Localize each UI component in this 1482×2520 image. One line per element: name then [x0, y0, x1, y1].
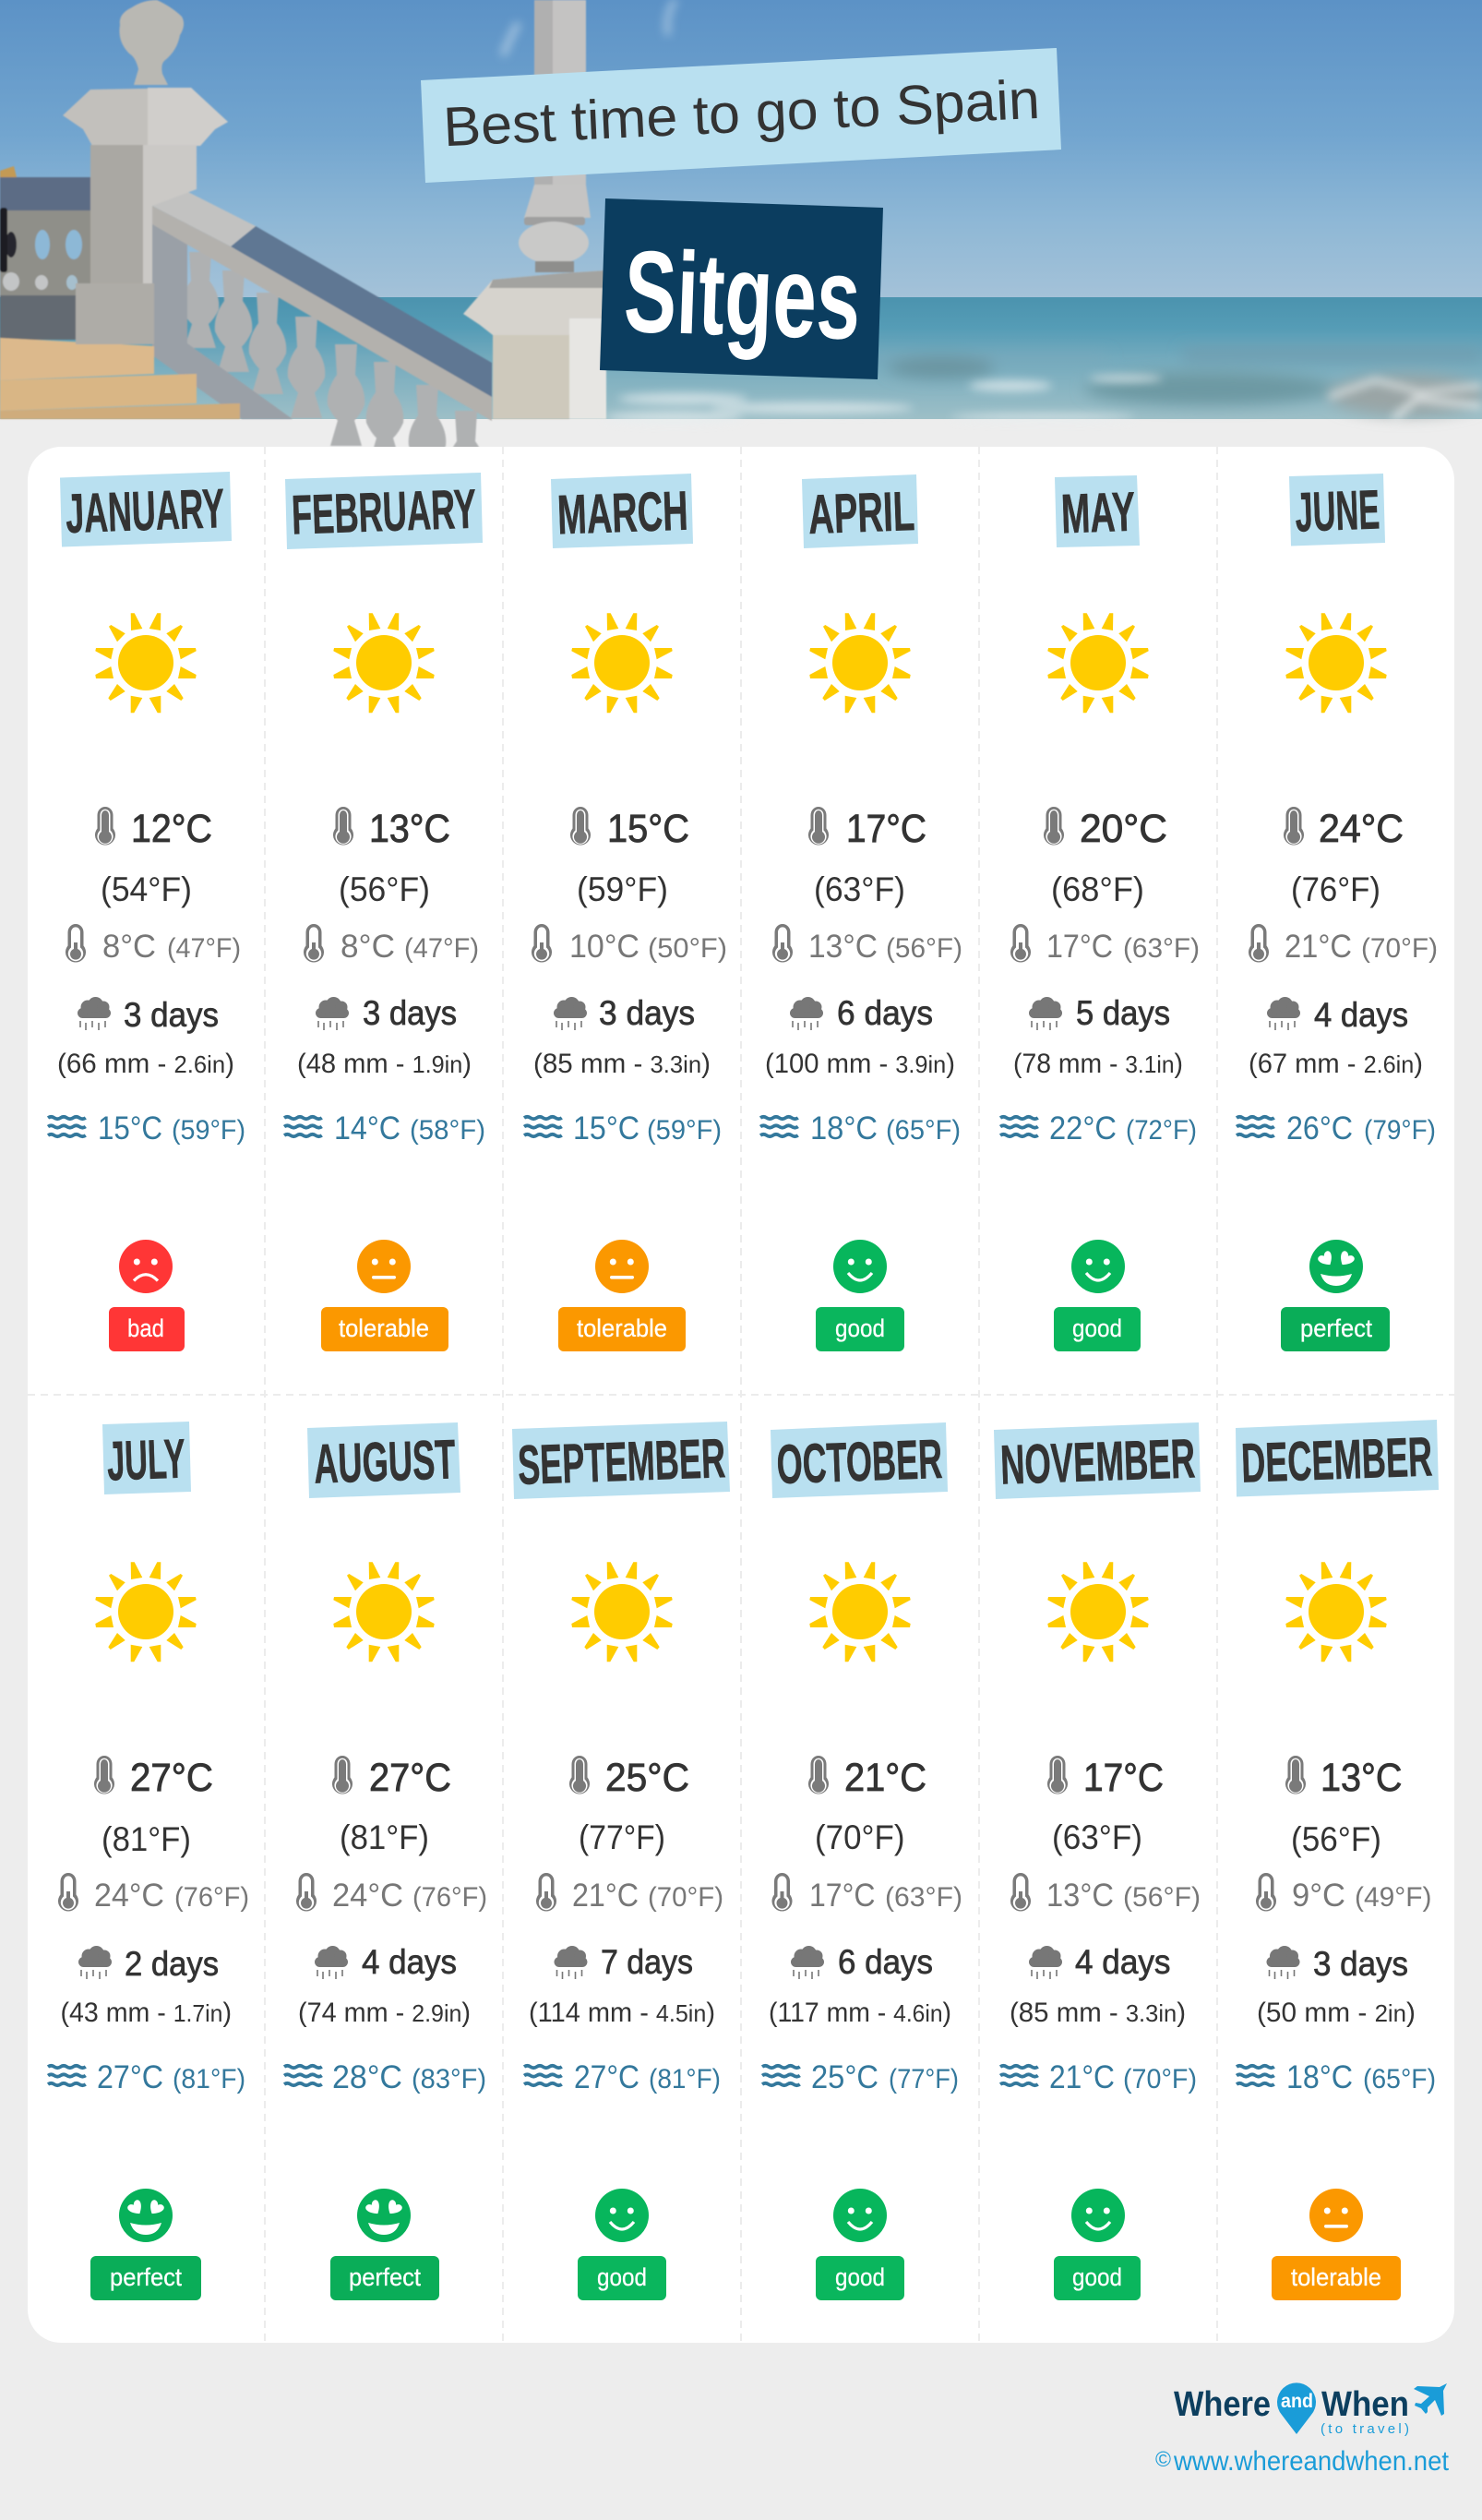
month label: AUGUST — [313, 1428, 457, 1495]
rainfall: (78 mm - 3.1in) — [1013, 1049, 1183, 1079]
panel: May — [1000, 475, 1200, 1351]
rating — [1054, 1240, 1141, 1351]
panel: July — [48, 1422, 249, 2300]
low temperature — [771, 1873, 962, 1914]
average temperature: (76°F) — [1291, 870, 1380, 908]
rating: good — [835, 2263, 885, 2291]
logo: Where and When (to travel): When — [1321, 2385, 1409, 2424]
rating: perfect — [110, 2263, 182, 2291]
low temperature: 13°C — [808, 929, 878, 965]
low temperature: 13°C — [1046, 1878, 1114, 1914]
low temperature: 9°C — [1292, 1878, 1345, 1914]
low temperature: (50°F) — [648, 933, 727, 964]
low temperature: (56°F) — [886, 933, 962, 964]
low temperature — [304, 924, 479, 965]
rainfall: 3 days — [363, 994, 457, 1032]
sea temperature: (77°F) — [889, 2064, 959, 2094]
average temperature: 27°C — [369, 1756, 451, 1800]
panel: October — [762, 1422, 962, 2300]
rainfall: (48 mm - 1.9in) — [297, 1049, 472, 1079]
low temperature: 8°C — [102, 929, 156, 965]
rating — [321, 1240, 448, 1351]
panel: September — [512, 1422, 730, 2300]
month label — [285, 473, 483, 549]
rating: good — [1072, 2263, 1122, 2291]
low temperature — [1256, 1873, 1432, 1914]
sea temperature: 15°C — [573, 1110, 639, 1146]
sea temperature: (65°F) — [1363, 2064, 1436, 2094]
average temperature — [95, 807, 212, 908]
rainfall: (114 mm - 4.5in) — [529, 1998, 715, 2028]
rainfall: 4 days — [1075, 1943, 1170, 1981]
low temperature — [296, 1873, 487, 1914]
month label — [1289, 474, 1385, 546]
sea temperature — [524, 2059, 721, 2095]
average temperature: 25°C — [605, 1756, 689, 1800]
icon: sun — [809, 1562, 911, 1662]
copyright url: © — [1155, 2447, 1171, 2471]
low temperature: (63°F) — [1123, 933, 1200, 964]
low temperature: 17°C — [1046, 929, 1113, 965]
average temperature: 13°C — [1321, 1756, 1403, 1800]
panel: November — [994, 1422, 1201, 2300]
sea temperature: 18°C — [810, 1110, 878, 1146]
average temperature: 17°C — [1083, 1756, 1164, 1800]
copyright url: www.whereandwhen.net — [1173, 2446, 1450, 2477]
month label: FEBRUARY — [291, 478, 477, 546]
average temperature: (81°F) — [102, 1820, 191, 1858]
stair balusters — [182, 252, 484, 512]
sea temperature: (81°F) — [173, 2064, 245, 2094]
rating — [558, 1240, 686, 1351]
sea temperature — [762, 2059, 959, 2095]
rainfall: (50 mm - 2in) — [1257, 1998, 1416, 2028]
rainfall: 6 days — [838, 1943, 933, 1981]
month label: MAY — [1060, 481, 1136, 545]
sea temperature: 18°C — [1286, 2059, 1353, 2095]
average temperature — [569, 1756, 689, 1856]
month label: SEPTEMBER — [517, 1427, 726, 1496]
rainfall — [61, 1945, 232, 2028]
sea temperature: 25°C — [811, 2059, 878, 2095]
middle post and urn — [534, 0, 586, 189]
panel: August — [284, 1422, 487, 2300]
low temperature: (47°F) — [404, 933, 479, 964]
average temperature: (54°F) — [101, 870, 192, 908]
sea temperature: 27°C — [574, 2059, 639, 2095]
sea temperature: 28°C — [332, 2059, 402, 2095]
average temperature — [1285, 1756, 1403, 1858]
rating — [816, 2189, 904, 2300]
sea temperature: (59°F) — [172, 1115, 245, 1146]
rating — [109, 1240, 185, 1351]
average temperature — [570, 807, 689, 908]
low temperature: (63°F) — [885, 1882, 962, 1913]
rating: perfect — [349, 2263, 421, 2291]
month label: JULY — [106, 1428, 186, 1492]
sea temperature — [48, 1110, 245, 1146]
low temperature: 21°C — [1285, 929, 1352, 965]
sea temperature: (72°F) — [1126, 1115, 1197, 1146]
sea temperature: (58°F) — [410, 1115, 485, 1146]
average temperature: 24°C — [1319, 807, 1404, 851]
rating: good — [835, 1314, 885, 1342]
average temperature — [808, 1756, 926, 1856]
left post with finial — [119, 0, 184, 85]
panel: April — [760, 474, 962, 1351]
rainfall — [1249, 996, 1423, 1079]
panel: March — [524, 474, 727, 1351]
low temperature: 8°C — [341, 929, 395, 965]
low temperature — [66, 924, 241, 965]
city name banner — [600, 198, 883, 379]
rainfall: 2 days — [125, 1945, 219, 1983]
month label — [102, 1422, 191, 1494]
low temperature: (76°F) — [412, 1882, 487, 1913]
average temperature: 27°C — [130, 1756, 213, 1800]
sea temperature: (79°F) — [1364, 1115, 1436, 1146]
rainfall — [1010, 1943, 1186, 2028]
rating — [578, 2189, 666, 2300]
panel: June — [1237, 474, 1438, 1351]
rainfall: (117 mm - 4.6in) — [769, 1998, 951, 2028]
rainfall — [1257, 1945, 1416, 2028]
low temperature: 21°C — [572, 1878, 639, 1914]
average temperature — [1044, 807, 1167, 908]
sea temperature — [284, 2059, 486, 2095]
stair rail — [231, 226, 492, 399]
panel: January — [48, 472, 245, 1351]
back balustrade — [0, 177, 90, 340]
average temperature: 13°C — [369, 807, 450, 851]
sea temperature: (65°F) — [886, 1115, 961, 1146]
month label: MARCH — [556, 480, 689, 546]
city name banner: Sitges — [622, 226, 863, 364]
logo: Where and When (to travel): and — [1281, 2391, 1313, 2412]
rainfall — [57, 996, 234, 1079]
sea temperature — [1000, 2059, 1197, 2095]
month label: JANUARY — [65, 477, 225, 545]
rainfall — [765, 994, 955, 1079]
rating — [816, 1240, 904, 1351]
low temperature: 24°C — [94, 1878, 164, 1914]
rainfall — [1013, 994, 1183, 1079]
average temperature: (70°F) — [815, 1818, 904, 1856]
rainfall — [529, 1943, 715, 2028]
icon: sun — [333, 1562, 435, 1662]
average temperature — [1284, 807, 1404, 908]
sea temperature: (83°F) — [412, 2064, 486, 2094]
average temperature — [332, 1756, 451, 1856]
rainfall: 7 days — [601, 1943, 693, 1981]
rainfall: (67 mm - 2.6in) — [1249, 1049, 1423, 1079]
average temperature: (56°F) — [1291, 1820, 1381, 1858]
average temperature: (81°F) — [340, 1818, 429, 1856]
rainfall: (100 mm - 3.9in) — [765, 1049, 955, 1079]
icon: sun — [1047, 613, 1149, 713]
stair base — [152, 222, 293, 419]
rainfall — [298, 1943, 471, 2028]
sea temperature: 27°C — [97, 2059, 163, 2095]
sea temperature: 22°C — [1049, 1110, 1117, 1146]
sea temperature — [524, 1110, 722, 1146]
low temperature: (47°F) — [167, 933, 241, 964]
average temperature: 15°C — [607, 807, 689, 851]
rating: good — [1072, 1314, 1122, 1342]
sea temperature — [48, 2059, 245, 2095]
average temperature: (77°F) — [579, 1818, 665, 1856]
panel: December — [1236, 1420, 1439, 2300]
month label: JUNE — [1294, 478, 1380, 544]
sandy steps — [0, 338, 154, 380]
month label — [307, 1422, 460, 1498]
month label: OCTOBER — [775, 1428, 943, 1495]
rainfall — [533, 994, 711, 1079]
sea temperature — [1237, 1110, 1436, 1146]
rainfall: 3 days — [124, 996, 219, 1034]
low temperature — [1010, 924, 1200, 965]
sea temperature: (70°F) — [1123, 2064, 1197, 2094]
month label — [551, 474, 693, 548]
rating: bad — [127, 1314, 164, 1342]
average temperature — [333, 807, 450, 908]
average temperature: (56°F) — [339, 870, 430, 908]
rating — [1281, 1240, 1390, 1351]
panel: February — [284, 473, 485, 1351]
icon: sun — [95, 613, 197, 713]
rating — [90, 2189, 201, 2300]
rainfall — [297, 994, 472, 1079]
icon: sun — [1285, 1562, 1387, 1662]
rainfall: (66 mm - 2.6in) — [57, 1049, 234, 1079]
rating: perfect — [1300, 1314, 1372, 1342]
month label — [512, 1422, 730, 1499]
average temperature: 17°C — [846, 807, 926, 851]
calendar card — [28, 447, 1454, 2343]
rating: tolerable — [1291, 2263, 1381, 2291]
rating — [1272, 2189, 1401, 2300]
rainfall — [769, 1943, 951, 2028]
low temperature: 17°C — [809, 1878, 875, 1914]
average temperature: 20°C — [1080, 807, 1167, 851]
average temperature: (63°F) — [1052, 1818, 1142, 1856]
low temperature — [536, 1873, 723, 1914]
average temperature: (59°F) — [577, 870, 668, 908]
rainfall: (74 mm - 2.9in) — [298, 1998, 471, 2028]
sea temperature: (59°F) — [647, 1115, 722, 1146]
rainfall: 4 days — [1314, 996, 1408, 1034]
rating: tolerable — [577, 1314, 667, 1342]
low temperature: (56°F) — [1123, 1882, 1201, 1913]
icon: map pin — [1277, 2382, 1316, 2434]
rating — [330, 2189, 439, 2300]
sea temperature: 26°C — [1286, 1110, 1353, 1146]
month label — [771, 1422, 948, 1498]
low temperature — [58, 1873, 249, 1914]
logo: Where and When (to travel) — [1174, 2382, 1447, 2437]
sea temperature — [1000, 1110, 1197, 1146]
sea temperature — [760, 1110, 961, 1146]
rating — [1054, 2189, 1141, 2300]
low temperature: (76°F) — [174, 1882, 249, 1913]
rainfall: 3 days — [1313, 1945, 1408, 1983]
logo: Where and When (to travel): (to travel) — [1321, 2421, 1409, 2437]
low temperature — [1010, 1873, 1201, 1914]
low temperature: (70°F) — [648, 1882, 723, 1913]
rainfall: 3 days — [599, 994, 695, 1032]
icon: sun — [95, 1562, 197, 1662]
low temperature: 10°C — [569, 929, 639, 965]
month label — [994, 1422, 1201, 1499]
rainfall: (85 mm - 3.3in) — [1010, 1998, 1186, 2028]
logo: Where and When (to travel): Where — [1174, 2385, 1271, 2424]
month label: APRIL — [807, 480, 915, 546]
rainfall: 6 days — [837, 994, 933, 1032]
month label — [60, 472, 232, 546]
low temperature: (70°F) — [1361, 933, 1438, 964]
sea temperature — [284, 1110, 485, 1146]
sea temperature: (81°F) — [649, 2064, 721, 2094]
sea temperature: 14°C — [334, 1110, 400, 1146]
icon: sun — [333, 613, 435, 713]
rainfall: 4 days — [362, 1943, 457, 1981]
icon: sun — [1285, 613, 1387, 713]
rating: tolerable — [339, 1314, 429, 1342]
average temperature: 12°C — [131, 807, 212, 851]
header photo: Sitges seafront balustrade — [0, 0, 1482, 512]
average temperature — [1047, 1756, 1164, 1856]
month label — [1055, 475, 1140, 547]
average temperature: (68°F) — [1051, 870, 1144, 908]
title banner: Best time to go to Spain — [442, 68, 1041, 158]
icon: sun — [1047, 1562, 1149, 1662]
title banner — [421, 48, 1061, 183]
icon: sun — [571, 613, 673, 713]
low temperature — [1249, 924, 1438, 965]
average temperature — [808, 807, 926, 908]
sea temperature: 21°C — [1049, 2059, 1115, 2095]
average temperature: 21°C — [844, 1756, 926, 1800]
low temperature: (49°F) — [1355, 1882, 1432, 1913]
icon: airplane — [1414, 2383, 1447, 2416]
average temperature — [94, 1756, 213, 1858]
sea temperature — [1237, 2059, 1436, 2095]
icon: sun — [571, 1562, 673, 1662]
low temperature — [532, 924, 727, 965]
average temperature: (63°F) — [814, 870, 905, 908]
rainfall: (85 mm - 3.3in) — [533, 1049, 711, 1079]
icon: sun — [809, 613, 911, 713]
rating: good — [597, 2263, 647, 2291]
month label — [802, 474, 918, 548]
rainfall: 5 days — [1076, 994, 1170, 1032]
rainfall: (43 mm - 1.7in) — [61, 1998, 232, 2028]
low temperature: 24°C — [332, 1878, 403, 1914]
month label: NOVEMBER — [999, 1427, 1196, 1496]
low temperature — [772, 924, 962, 965]
sea temperature: 15°C — [98, 1110, 162, 1146]
